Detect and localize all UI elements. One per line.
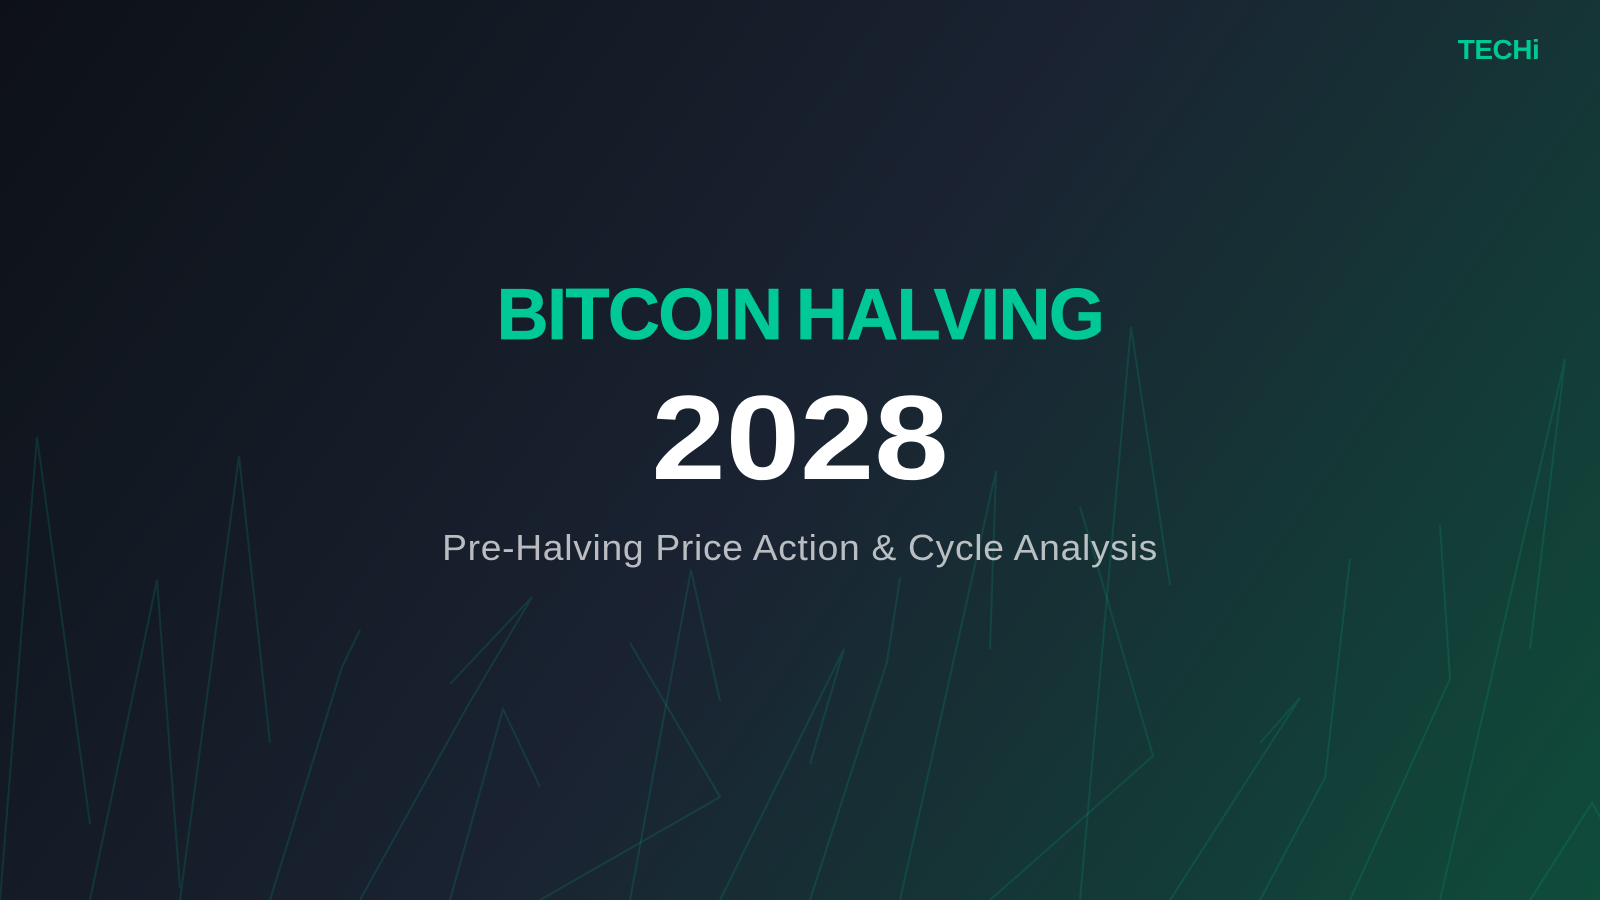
- subtitle: Pre-Halving Price Action & Cycle Analysis: [442, 527, 1158, 568]
- heading: year 2028: 2028: [651, 371, 949, 505]
- title: Bitcoin Halving: BITCOIN HALVING: [497, 275, 1103, 355]
- logo: TECHi: TECHi: [1458, 34, 1539, 65]
